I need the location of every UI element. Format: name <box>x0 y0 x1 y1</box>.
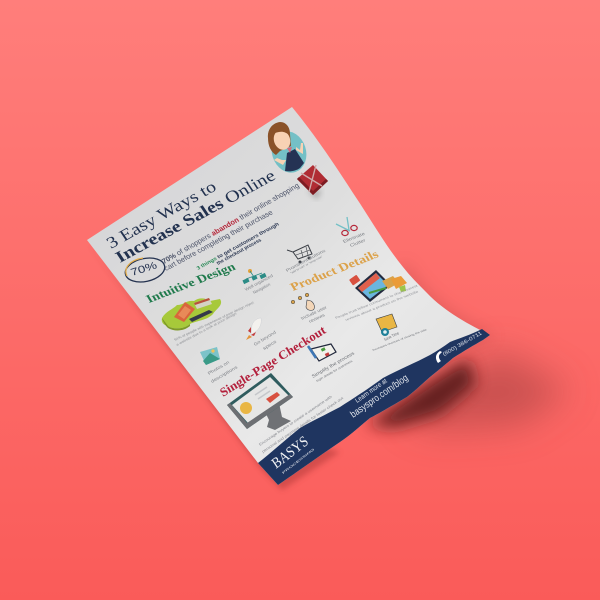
label: Clutter <box>349 238 367 248</box>
icon: stars and hand <box>291 293 314 310</box>
icon: rocket <box>246 318 261 340</box>
label: Increases chances of closing the sale <box>372 328 428 352</box>
section: intuitive design <box>144 260 255 347</box>
intro text: 70% of shoppers abandon their online shopping <box>160 181 301 265</box>
text: Encourage buyers to create a username with <box>258 394 333 447</box>
heading: Product Details <box>288 247 381 293</box>
icon: sitemap <box>242 269 267 284</box>
logo: BASYS <box>268 432 311 472</box>
illustration: online store <box>349 270 407 302</box>
item: prominent buttons <box>285 245 327 275</box>
label <box>244 274 274 295</box>
label <box>253 330 278 351</box>
item: go beyond specs <box>246 318 278 351</box>
label: specs <box>262 339 278 351</box>
text: reviews about a product on the website <box>344 289 419 322</box>
illustration: monitor <box>227 373 293 430</box>
text: 94% of people with experience of poor design reject <box>173 300 255 342</box>
label: descriptions <box>210 365 239 384</box>
title: 3 Easy Ways to <box>103 178 220 253</box>
item: navigation <box>242 269 274 295</box>
logo <box>268 432 316 475</box>
learn more: Learn more at <box>354 377 389 404</box>
intro text: cart before completing their purchase <box>162 208 275 272</box>
stat: 70 percent ring <box>123 255 167 285</box>
learn more <box>349 373 410 420</box>
label: Navigation <box>252 282 272 295</box>
label: Go beyond <box>253 330 277 347</box>
paper shadow <box>88 243 570 490</box>
text: People trust fellow consumers to share honest <box>334 283 419 320</box>
label: login details for customers <box>316 359 353 383</box>
subtitle: 3 things: the checkout process <box>216 238 263 266</box>
label: Save Time <box>383 331 401 342</box>
icon: scissors <box>336 217 357 236</box>
heading: Intuitive Design <box>144 260 238 305</box>
label: Photos on <box>207 360 231 376</box>
section: product details <box>288 247 419 322</box>
title: Increase Sales Online <box>112 167 279 267</box>
learn more: basyspro.com/blog <box>349 373 410 420</box>
label <box>300 305 328 324</box>
icon: cart <box>287 245 312 263</box>
text: personal and payment details for faster check out <box>261 395 345 454</box>
paper sheet <box>87 107 490 485</box>
item: eliminate clutter <box>336 217 367 248</box>
illustration: green store <box>162 298 221 330</box>
phone number: (800) 386-0711 <box>442 330 484 357</box>
icon: process board <box>308 344 336 361</box>
item: simplify the process <box>308 344 356 383</box>
label: Prominent Buttons <box>285 248 327 273</box>
icon: picture <box>200 347 220 365</box>
stat: 70 percent ring: 70% <box>129 260 158 279</box>
icon: red x <box>297 165 328 200</box>
item: include user reviews <box>291 293 328 324</box>
heading: Single-Page Checkout <box>218 323 329 400</box>
label: Include user <box>300 305 328 321</box>
label: "add to cart" or "shop now" <box>290 255 323 275</box>
section: single-page checkout <box>218 323 345 454</box>
item: photos on descriptions <box>200 347 239 384</box>
icon: woman avatar <box>266 122 312 177</box>
text: a website due to a look at poor design <box>175 311 237 347</box>
footer band <box>258 329 490 485</box>
logo: PROCESSING <box>282 447 316 475</box>
subtitle: 3 things: 3 things to get customers through <box>196 222 281 271</box>
label: reviews <box>308 313 327 324</box>
icon: phone <box>436 351 442 363</box>
label: Eliminate <box>342 232 366 244</box>
label: Simplify the process <box>311 351 356 379</box>
item: save time <box>372 314 428 352</box>
label: Well organized <box>244 274 274 292</box>
icon: document and clock <box>376 314 397 336</box>
